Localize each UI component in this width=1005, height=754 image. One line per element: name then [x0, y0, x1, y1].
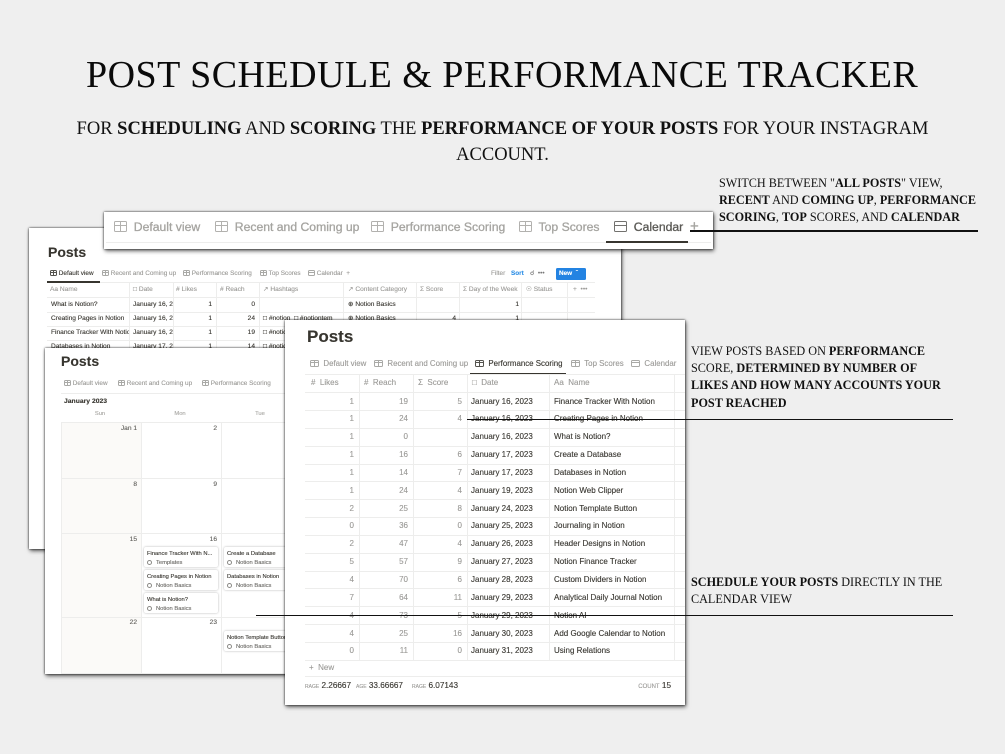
- panel: performance scoring table: January 28, 2023: [471, 575, 533, 584]
- panel: performance scoring table: Databases in Notion: [554, 468, 626, 477]
- panel: calendar view: 23: [210, 619, 217, 626]
- panel: performance scoring table: 0: [350, 646, 354, 655]
- panel: performance scoring table: 1: [350, 486, 354, 495]
- panel: calendar view: Notion Basics: [236, 582, 271, 588]
- weekday headers: [95, 411, 265, 417]
- callout line: performance scoring: [467, 419, 953, 420]
- view tabs: Performance Scoring: [488, 359, 563, 368]
- panel: all posts table view: 1: [515, 315, 519, 322]
- panel: performance scoring table: 1: [350, 414, 354, 423]
- callout line: calendar: [256, 615, 953, 616]
- panel: calendar view: 22: [130, 619, 137, 626]
- view tabs: ☌ •••: [530, 270, 545, 277]
- panel: performance scoring table: 8: [458, 504, 462, 513]
- callout text: performance: VIEW POSTS BASED ON PERFORMANCE: [691, 344, 925, 358]
- panel: all posts table view: January 17, 2: [133, 343, 173, 350]
- panel: performance scoring table: 7: [458, 468, 462, 477]
- calendar cards: Templates: [156, 560, 182, 566]
- panel: performance scoring table: Notion AI: [554, 611, 586, 620]
- table header: Aa Name: [554, 378, 590, 387]
- callout text: switch views: RECENT AND COMING UP, PERFORMANCE: [719, 193, 976, 207]
- panel: all posts table view: [29, 228, 621, 549]
- tab: default view: Default view: [134, 220, 200, 234]
- panel: calendar view: What is Notion?: [147, 597, 188, 603]
- panel: performance scoring table: 70: [399, 575, 408, 584]
- panel: performance scoring table: 64: [399, 593, 408, 602]
- panel: all posts table view: □ #notion: [263, 329, 290, 336]
- panel: all posts table view: 14: [248, 343, 255, 350]
- panel: performance scoring table: Custom Dividers in Notion: [554, 575, 646, 584]
- panel: performance scoring table: January 30, 2023: [471, 629, 533, 638]
- panel: performance scoring table: 2: [350, 539, 354, 548]
- panel: performance scoring table: 5: [350, 557, 354, 566]
- table header: ↗ Content Category: [348, 286, 407, 293]
- panel: all posts table view: January 16, 2: [133, 315, 173, 322]
- panel: calendar view: Notion Basics: [236, 644, 271, 650]
- panel: performance scoring table: [285, 320, 685, 705]
- calendar cards: Finance Tracker With N...: [147, 551, 212, 557]
- panel: performance scoring table: 6: [458, 575, 462, 584]
- panel: performance scoring table: January 27, 2023: [471, 557, 533, 566]
- table header: Σ Day of the Week: [463, 286, 518, 293]
- panel: performance scoring table: 11: [400, 646, 408, 655]
- panel: performance scoring table: January 25, 2023: [471, 521, 533, 530]
- subtitle: [77, 119, 928, 165]
- panel: performance scoring table: 16: [453, 629, 462, 638]
- panel: calendar view: 9: [213, 481, 217, 488]
- day numbers: Jan 1: [121, 425, 137, 432]
- panel: performance scoring table: 5: [458, 611, 462, 620]
- panel: performance scoring table: 57: [399, 557, 408, 566]
- panel: performance scoring table: 1: [350, 432, 354, 441]
- panel: performance scoring table: Notion Finance Tracker: [554, 557, 637, 566]
- panel: performance scoring table: 25: [399, 504, 408, 513]
- panel: performance scoring table: January 24, 2023: [471, 504, 533, 513]
- table rows: Finance Tracker With Notion: [554, 396, 655, 406]
- month label: January 2023: [64, 398, 107, 405]
- panel: calendar view: Notion Basics: [156, 582, 191, 588]
- tab: calendar active: Calendar: [634, 220, 683, 234]
- table header: [311, 378, 590, 387]
- view tabs: Performance Scoring: [192, 270, 252, 277]
- panel: performance scoring table: 47: [399, 539, 408, 548]
- panel: performance scoring table: January 16, 2023: [471, 432, 533, 441]
- summary footer: RAGE 6.07143: [412, 681, 458, 690]
- callout text: switch views: [719, 176, 976, 224]
- add new row: + New: [309, 663, 334, 672]
- panel: calendar view: 16: [210, 536, 217, 543]
- title: POST SCHEDULE & PERFORMANCE TRACKER: [86, 54, 918, 96]
- view tabs: Sort: [511, 270, 524, 277]
- view tabs: New ˇ: [559, 270, 578, 277]
- table header: ☉ Status: [526, 286, 552, 293]
- callout line: tabs: [690, 230, 978, 232]
- panel: all posts table view: 1: [208, 329, 212, 336]
- view tabs: [310, 359, 676, 368]
- callout text: switch views: SWITCH BETWEEN "ALL POSTS" VIEW,: [719, 176, 943, 190]
- tab: recent and coming up: Recent and Coming up: [235, 220, 359, 234]
- panel: performance scoring table: 0: [458, 521, 462, 530]
- panel: performance scoring table: January 19, 2023: [471, 486, 533, 495]
- panel: performance scoring table: 4: [350, 629, 354, 638]
- panel: performance scoring table: 4: [350, 575, 354, 584]
- callout text: schedule: CALENDAR VIEW: [691, 592, 792, 606]
- sunday column shading: [61, 422, 141, 673]
- table header: # Likes: [176, 286, 197, 293]
- panel: performance scoring table: 11: [454, 593, 462, 602]
- table header: Σ Score: [418, 378, 448, 387]
- view tabs: Default view: [59, 270, 94, 277]
- calendar cards: [144, 547, 218, 567]
- panel: all posts table view: □ #notion □ #notiontem: [263, 315, 333, 322]
- panel: performance scoring table: January 29, 2023: [471, 593, 533, 602]
- panel: performance scoring table: January 31, 2023: [471, 646, 533, 655]
- table rows: 5: [458, 396, 462, 406]
- view tabs: Default view: [73, 380, 108, 387]
- panel: performance scoring table: January 17, 2023: [471, 450, 533, 459]
- heading: posts: Posts: [307, 327, 353, 346]
- panel: performance scoring table: January 29, 2023: [471, 611, 533, 620]
- callout text: performance: POST REACHED: [691, 396, 787, 410]
- table rows: 1: [208, 301, 212, 308]
- heading: posts: Posts: [61, 353, 99, 369]
- table rows: What is Notion?: [51, 301, 98, 308]
- view tabs: Filter: [491, 270, 505, 277]
- panel: performance scoring table: 25: [399, 629, 408, 638]
- panel: performance scoring table: Add Google Calendar to Notion: [554, 629, 665, 638]
- panel: all posts table view: Creating Pages in Notion: [51, 315, 124, 322]
- table rows: January 16, 2023: [471, 396, 533, 406]
- panel: all posts table view: 1: [208, 315, 212, 322]
- panel: performance scoring table: 24: [399, 486, 408, 495]
- callout text: performance: SCORE, DETERMINED BY NUMBER OF: [691, 361, 917, 375]
- panel: all posts table view: □ #notion: [263, 343, 290, 350]
- panel: performance scoring table: Journaling in Notion: [554, 521, 625, 530]
- view tabs: Recent and Coming up: [111, 270, 176, 277]
- view tabs: Recent and Coming up: [387, 359, 468, 368]
- panel: calendar view: [45, 348, 345, 674]
- summary footer: RAGE 2.26667: [305, 681, 351, 690]
- weekday headers: Sun: [95, 411, 105, 417]
- panel: performance scoring table: What is Notion?: [554, 432, 610, 441]
- table rows: 19: [399, 396, 408, 406]
- panel: performance scoring table: 7: [350, 593, 354, 602]
- view tabs: Calendar +: [317, 270, 350, 277]
- panel: calendar view: Create a Database: [227, 551, 276, 557]
- callout text: switch views: SCORING, TOP SCORES, AND CALENDAR: [719, 210, 960, 224]
- table header: □ Date: [133, 286, 153, 293]
- panel: performance scoring table: Create a Database: [554, 450, 621, 459]
- table header: [50, 286, 588, 293]
- panel: performance scoring table: January 16, 2023: [471, 414, 533, 423]
- panel: calendar view: Databases in Notion: [227, 574, 279, 580]
- panel: performance scoring table: 0: [404, 432, 408, 441]
- panel: performance scoring table: Header Designs in Notion: [554, 539, 645, 548]
- panel: performance scoring table: Creating Pages in Notion: [554, 414, 643, 423]
- table rows: [350, 396, 655, 406]
- panel: performance scoring table: 2: [350, 504, 354, 513]
- callout text: performance: LIKES AND HOW MANY ACCOUNTS YOUR: [691, 378, 941, 392]
- panel: performance scoring table: 1: [350, 468, 354, 477]
- weekday headers: Mon: [174, 411, 186, 417]
- heading: posts: Posts: [48, 244, 86, 260]
- panel: performance scoring table: Notion Template Button: [554, 504, 637, 513]
- panel: performance scoring table: 4: [458, 414, 462, 423]
- callout text: performance: [691, 344, 941, 410]
- summary footer: COUNT 15: [638, 681, 671, 690]
- table header: Aa Name: [50, 286, 78, 293]
- panel: performance scoring table: 36: [399, 521, 408, 530]
- panel: performance scoring table: 16: [399, 450, 408, 459]
- table rows: 0: [251, 301, 255, 308]
- panel: all posts table view: January 16, 2: [133, 329, 173, 336]
- view tabs: Top Scores: [584, 359, 624, 368]
- panel: performance scoring table: 24: [399, 414, 408, 423]
- panel: calendar view: Creating Pages in Notion: [147, 574, 211, 580]
- table header: ↗ Hashtags: [263, 286, 298, 293]
- panel: calendar view: 15: [130, 536, 137, 543]
- panel: performance scoring table: Notion Web Clipper: [554, 486, 623, 495]
- subtitle: FOR SCHEDULING AND SCORING THE PERFORMANCE OF YOUR POSTS FOR YOUR INSTAGRAM: [77, 119, 928, 139]
- table rows: January 16, 2: [133, 301, 173, 308]
- table header: # Reach: [220, 286, 245, 293]
- panel: all posts table view: 19: [248, 329, 255, 336]
- table header: # Reach: [364, 378, 396, 387]
- table header: Σ Score: [420, 286, 443, 293]
- view tabs: [64, 380, 271, 387]
- view tabs: Recent and Coming up: [127, 380, 192, 387]
- add tab icon: +: [690, 218, 699, 235]
- view tabs: Performance Scoring: [211, 380, 271, 387]
- table rows: 1: [350, 396, 354, 406]
- panel: calendar view: Notion Basics: [236, 560, 271, 566]
- view tabs: Top Scores: [269, 270, 301, 277]
- view tabs: Calendar: [644, 359, 676, 368]
- table rows: 1: [515, 301, 519, 308]
- panel: performance scoring table: Using Relations: [554, 646, 610, 655]
- panel: calendar view: Notion Basics: [156, 606, 191, 612]
- panel: performance scoring table: 6: [458, 450, 462, 459]
- panel: performance scoring table: 9: [458, 557, 462, 566]
- panel: performance scoring table: 73: [399, 611, 408, 620]
- table rows: ⊕ Notion Basics: [348, 301, 396, 308]
- panel: all posts table view: 24: [248, 315, 255, 322]
- panel: all posts table view: 1: [208, 343, 212, 350]
- panel: performance scoring table: 4: [458, 486, 462, 495]
- panel: performance scoring table: 4: [458, 539, 462, 548]
- panel: calendar view: Notion Template Button: [227, 635, 287, 641]
- panel: performance scoring table: 4: [350, 611, 354, 620]
- panel: performance scoring table: 14: [399, 468, 408, 477]
- panel: performance scoring table: 0: [458, 646, 462, 655]
- tab: performance scoring: Performance Scoring: [391, 220, 505, 234]
- panel: all posts table view: 4: [452, 315, 456, 322]
- table header: # Likes: [311, 378, 339, 387]
- panel: all posts table view: ⊕ Notion Basics: [348, 315, 396, 322]
- table header: + •••: [573, 286, 587, 293]
- panel: tab bar close-up: [104, 212, 713, 249]
- callout text: schedule: SCHEDULE YOUR POSTS DIRECTLY IN THE: [691, 575, 942, 589]
- panel: all posts table view: Databases in Notion: [51, 343, 110, 350]
- tab: top scores: Top Scores: [539, 220, 600, 234]
- panel: calendar view: 2: [213, 425, 217, 432]
- panel: calendar view: 8: [133, 481, 137, 488]
- panel: performance scoring table: Analytical Daily Journal Notion: [554, 593, 662, 602]
- panel: performance scoring table: January 17, 2023: [471, 468, 533, 477]
- summary footer: AGE 33.66667: [356, 681, 403, 690]
- view tabs: Default view: [323, 359, 366, 368]
- subtitle: ACCOUNT.: [456, 145, 549, 165]
- panel: performance scoring table: January 26, 2023: [471, 539, 533, 548]
- view tabs: [50, 268, 586, 280]
- table rows: [51, 301, 519, 308]
- summary footer: [305, 681, 671, 690]
- table header: □ Date: [472, 378, 498, 387]
- callout text: schedule: [691, 575, 942, 606]
- weekday headers: Tue: [255, 411, 265, 417]
- panel: performance scoring table: 1: [350, 450, 354, 459]
- panel: performance scoring table: 0: [350, 521, 354, 530]
